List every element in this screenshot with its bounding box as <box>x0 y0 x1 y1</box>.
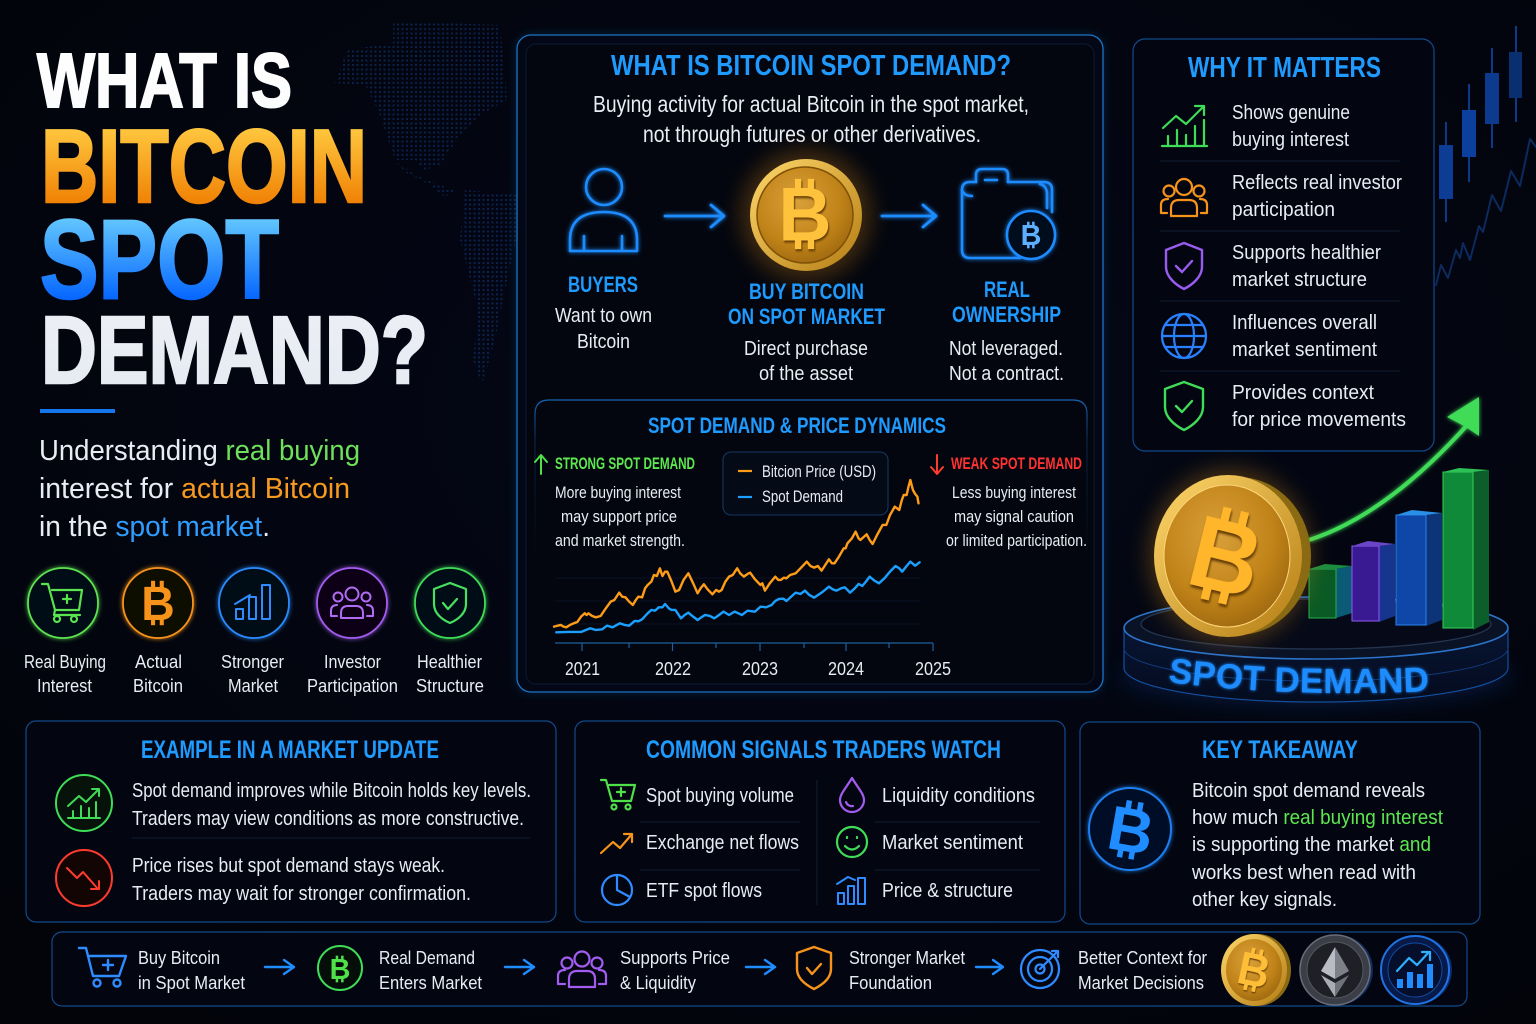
example: constructive conditions: Spot demand improves while Bitcoin holds key levels. <box>132 779 531 802</box>
step: real demand: Enters Market <box>379 972 482 993</box>
step: buy bitcoin <box>79 947 245 993</box>
signal: exchange net flows: Exchange net flows <box>646 831 799 854</box>
icon: stronger market <box>219 568 289 696</box>
arrow: spot market to ownership <box>882 205 936 227</box>
callout: weak spot demand <box>931 455 1087 550</box>
arrow: buyers to spot market <box>665 205 724 227</box>
item: reflects real investor participation: Reflects real investor <box>1232 171 1402 194</box>
step: supports price <box>558 947 730 993</box>
callout: strong spot demand: More buying interest <box>555 484 681 502</box>
icon: bitcoin coin: B <box>778 172 832 257</box>
chart axis <box>555 643 933 651</box>
item: influences overall market sentiment <box>1162 311 1377 361</box>
chart legend: Spot Demand <box>762 488 843 506</box>
item: reflects real investor participation: participation <box>1232 198 1335 221</box>
heading: COMMON SIGNALS TRADERS WATCH <box>646 736 1001 764</box>
item: supports healthier market structure <box>1166 241 1381 291</box>
callout: weak spot demand: may signal caution <box>954 508 1074 526</box>
definition text: not through futures or other derivatives. <box>643 121 981 147</box>
step: supports price: Supports Price <box>620 947 730 968</box>
signal: etf spot flows: ETF spot flows <box>646 879 762 902</box>
icon: investor participation: Participation <box>307 675 398 696</box>
icon: ethereum coin <box>1300 935 1373 1005</box>
step: stronger foundation: Stronger Market <box>849 947 965 968</box>
callout: strong spot demand <box>535 455 695 550</box>
step: better context: Market Decisions <box>1078 972 1204 993</box>
subtitle: in the spot market. <box>39 511 270 543</box>
step: buyers: Bitcoin <box>577 330 630 353</box>
heading: WHAT IS BITCOIN SPOT DEMAND? <box>611 50 1011 82</box>
example: constructive conditions <box>132 779 531 830</box>
callout: strong spot demand: STRONG SPOT DEMAND <box>555 455 695 473</box>
step: better context: Better Context for <box>1078 947 1207 968</box>
step: real ownership: Not leveraged. <box>949 337 1063 360</box>
step: real demand <box>318 946 482 993</box>
icon: large bitcoin coin <box>1148 468 1312 644</box>
step: buy bitcoin: Buy Bitcoin <box>138 947 220 968</box>
step: buyers: BUYERS <box>568 272 638 297</box>
definition text: Buying activity for actual Bitcoin in the spot market, <box>593 91 1029 117</box>
item: reflects real investor participation <box>1161 171 1402 221</box>
icon: stronger market: Stronger <box>221 651 284 672</box>
item: supports healthier market structure: market structure <box>1232 268 1367 291</box>
example: wait for confirmation: Price rises but spot demand stays weak. <box>132 854 445 877</box>
panel: key takeaway <box>1080 722 1480 924</box>
item: provides context for price movements: Provides context <box>1232 381 1374 404</box>
icon: positive trend <box>56 775 112 831</box>
item: shows genuine buying interest: buying interest <box>1232 128 1349 151</box>
item: supports healthier market structure: Supports healthier <box>1232 241 1381 264</box>
chart legend <box>723 452 888 515</box>
title: DEMAND? <box>41 297 428 404</box>
icon: real buying interest <box>24 568 106 696</box>
item: shows genuine buying interest: Shows genuine <box>1232 101 1350 124</box>
example: wait for confirmation: Traders may wait for stronger confirmation. <box>132 882 471 905</box>
step: buy on spot market: of the asset <box>759 362 853 385</box>
step: buy bitcoin: in Spot Market <box>138 972 245 993</box>
icon: actual bitcoin: B <box>141 577 175 631</box>
item: influences overall market sentiment: market sentiment <box>1232 338 1377 361</box>
step: stronger foundation: Foundation <box>849 972 932 993</box>
icon: buyer <box>570 169 637 251</box>
line chart: 2021 <box>565 658 600 679</box>
takeaway text: other key signals. <box>1192 888 1337 911</box>
icon: bitcoin badge <box>1089 788 1171 870</box>
icon: gold bitcoin coin: B <box>1233 941 1275 999</box>
title: BITCOIN <box>41 109 367 225</box>
step: real ownership: REAL <box>984 277 1030 302</box>
signal: market sentiment: Market sentiment <box>882 831 1023 854</box>
heading: EXAMPLE IN A MARKET UPDATE <box>141 736 439 764</box>
signal: liquidity conditions: Liquidity conditions <box>882 784 1035 807</box>
step: real ownership <box>949 277 1064 385</box>
icon: actual bitcoin: Bitcoin <box>133 675 183 696</box>
line chart <box>554 480 951 679</box>
icon: healthier structure <box>415 568 485 696</box>
item: shows genuine buying interest <box>1162 101 1350 151</box>
icon: investor participation <box>307 568 398 696</box>
heading: WHY IT MATTERS <box>1188 52 1381 84</box>
icon: gold bitcoin coin <box>1221 934 1291 1006</box>
panel: what is bitcoin spot demand <box>517 35 1103 692</box>
callout: weak spot demand: WEAK SPOT DEMAND <box>951 455 1082 473</box>
signal: price and structure: Price & structure <box>882 879 1013 902</box>
item: provides context for price movements: for price movements <box>1232 408 1406 431</box>
takeaway text: Bitcoin spot demand reveals <box>1192 779 1425 802</box>
background: candlestick chart <box>1436 26 1536 285</box>
subtitle <box>39 435 360 543</box>
takeaway text: works best when read with <box>1191 861 1416 884</box>
takeaway text: is supporting the market and <box>1192 833 1431 856</box>
example: constructive conditions: Traders may view conditions as more constructive. <box>132 807 524 830</box>
callout: strong spot demand: and market strength. <box>555 532 685 550</box>
icon: stronger market: Market <box>228 675 278 696</box>
item: provides context for price movements <box>1165 381 1406 431</box>
step: real ownership: Not a contract. <box>949 362 1064 385</box>
arrow: flow 4 <box>976 960 1003 974</box>
step: better context <box>1021 947 1207 993</box>
icon: wallet with bitcoin: B <box>1021 220 1041 252</box>
step: buy on spot market: ON SPOT MARKET <box>728 304 885 329</box>
icon: real buying interest: Real Buying <box>24 651 106 672</box>
arrow: flow 3 <box>746 960 775 974</box>
panel: common signals traders watch <box>575 721 1065 922</box>
item: influences overall market sentiment: Influences overall <box>1232 311 1377 334</box>
signal: price and structure <box>837 877 1013 904</box>
panel: process flow <box>52 932 1467 1006</box>
heading: KEY TAKEAWAY <box>1202 736 1358 764</box>
signal: exchange net flows <box>601 831 799 854</box>
icon: bitcoin badge: B <box>1103 793 1159 869</box>
arrow: flow 2 <box>505 960 534 974</box>
title: WHAT IS <box>37 38 292 124</box>
line chart: 2022 <box>655 658 691 679</box>
chart legend: Bitcion Price (USD) <box>762 463 876 481</box>
signal: spot buying volume: Spot buying volume <box>646 784 794 807</box>
icon: wallet with bitcoin <box>962 169 1055 259</box>
podium base <box>1120 597 1512 706</box>
background: dotted world map <box>335 23 516 385</box>
line chart: 2023 <box>742 658 778 679</box>
panel: example in a market update <box>26 721 556 922</box>
title <box>37 38 428 404</box>
takeaway text: how much real buying interest <box>1192 806 1443 829</box>
title: SPOT <box>40 197 279 322</box>
icon: bitcoin coin <box>740 149 872 281</box>
icon row: benefits <box>24 568 485 696</box>
icon: blue growth coin <box>1381 936 1452 1004</box>
step: real demand: B <box>330 954 350 986</box>
signal: spot buying volume <box>601 780 794 810</box>
step: buy on spot market: Direct purchase <box>744 337 868 360</box>
subtitle: interest for actual Bitcoin <box>39 473 350 505</box>
icon: investor participation: Investor <box>324 651 381 672</box>
definition text <box>593 91 1029 147</box>
icon: healthier structure: Structure <box>416 675 484 696</box>
arrow: rising trend <box>1309 397 1479 540</box>
icon: actual bitcoin <box>123 568 193 696</box>
illustration: spot demand podium <box>1118 395 1514 714</box>
step: buy on spot market <box>728 279 885 385</box>
subtitle: Understanding real buying <box>39 435 360 467</box>
icon: actual bitcoin: Actual <box>135 651 182 672</box>
podium label: SPOT DEMAND <box>1168 656 1430 696</box>
title underline <box>40 409 115 413</box>
step: buyers <box>555 272 652 353</box>
callout: weak spot demand: Less buying interest <box>952 484 1076 502</box>
icon: healthier structure: Healthier <box>417 651 482 672</box>
signal: market sentiment <box>837 827 1023 857</box>
line chart: 2025 <box>915 658 951 679</box>
step: stronger foundation <box>797 947 965 993</box>
bar chart: rising bars <box>1309 468 1489 630</box>
icon: negative trend <box>56 850 112 906</box>
icon: large bitcoin coin: B <box>1178 493 1273 621</box>
step: real ownership: OWNERSHIP <box>952 302 1061 327</box>
panel: why it matters <box>1133 39 1434 451</box>
signal: etf spot flows <box>602 875 762 905</box>
example: wait for confirmation <box>132 854 471 905</box>
arrow: flow 1 <box>265 960 294 974</box>
callout: weak spot demand: or limited participation. <box>946 532 1087 550</box>
chart heading: SPOT DEMAND & PRICE DYNAMICS <box>648 413 946 438</box>
step: supports price: & Liquidity <box>620 972 697 993</box>
step: real demand: Real Demand <box>379 947 475 968</box>
step: buy on spot market: BUY BITCOIN <box>749 279 864 304</box>
step: buyers: Want to own <box>555 304 652 327</box>
icon: real buying interest: Interest <box>37 675 92 696</box>
takeaway text <box>1191 779 1443 911</box>
signal: liquidity conditions <box>840 778 1035 812</box>
line chart: 2024 <box>828 658 864 679</box>
sub-panel: spot demand and price dynamics <box>535 400 1087 680</box>
callout: strong spot demand: may support price <box>561 508 677 526</box>
